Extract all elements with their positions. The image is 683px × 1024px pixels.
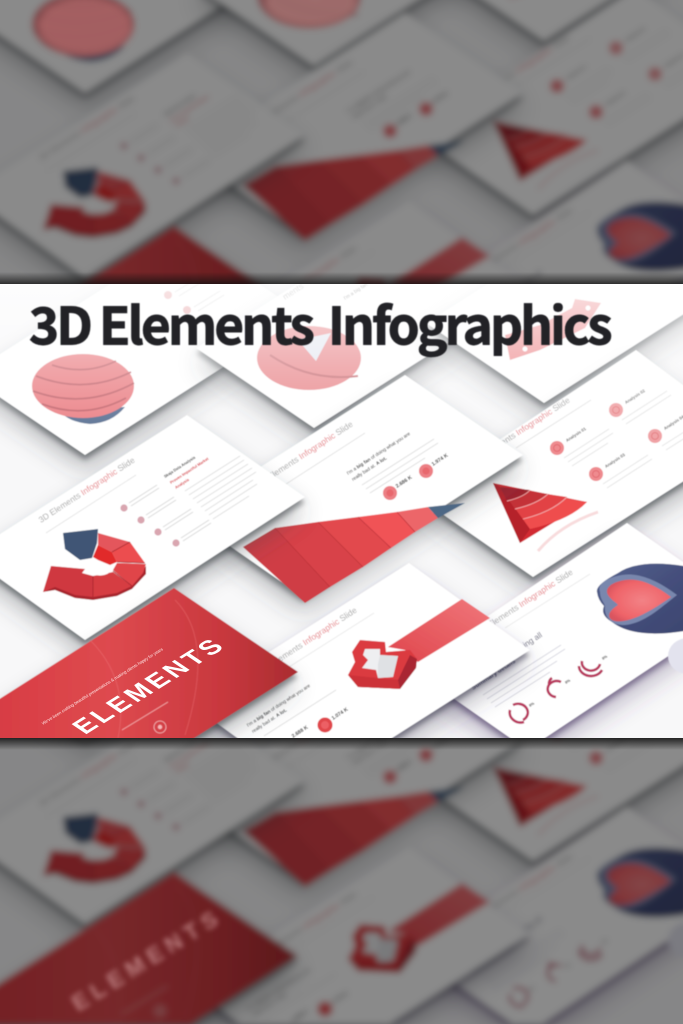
ring charts: 8% xyxy=(564,678,572,685)
list text and icons: Skaja Data Analysis xyxy=(163,455,196,479)
disc graphic xyxy=(257,326,361,390)
arrow graphic xyxy=(505,299,601,360)
blurred cover title: ELEMENTS xyxy=(67,902,228,1016)
slide: pyramid: 3D Elements Infographic Slide xyxy=(472,395,572,465)
title: 3D Elements xyxy=(29,286,313,360)
statistics text: really bad at. A lot. xyxy=(251,708,288,735)
slide: pyramid xyxy=(415,350,683,577)
swirl graphic xyxy=(43,529,146,600)
statistics text: really bad at. A lot. xyxy=(351,456,388,483)
cross graphic xyxy=(348,599,490,689)
staircase graphic xyxy=(243,503,465,603)
slide: red cross: 3D Elements Infographic Slide xyxy=(259,605,359,675)
statistics text: 2.686 K xyxy=(395,475,414,490)
slide: disc xyxy=(196,208,534,428)
cover button icon xyxy=(154,721,166,733)
statistics text xyxy=(246,683,350,740)
cover title: 3D xyxy=(13,733,71,771)
analysis icons: Analysis 02 xyxy=(624,388,646,405)
sphere graphic xyxy=(32,354,134,424)
panel: central slide collage xyxy=(0,284,683,738)
ring charts: 8% xyxy=(528,701,536,708)
statistics text xyxy=(346,431,450,500)
slide: disc: ments xyxy=(281,281,305,302)
list text and icons: Proven Impactful Market xyxy=(169,456,210,485)
pyramid graphic xyxy=(493,483,598,551)
panel: top blurred band xyxy=(0,0,683,284)
analysis icons: Analysis 01 xyxy=(565,426,587,443)
statistics text: 1.974 K xyxy=(431,453,450,468)
slide: red cover xyxy=(0,588,298,740)
slide: staircase: 3D Elements Infographic Slide xyxy=(255,419,355,489)
slide: staircase xyxy=(185,375,523,603)
panel: bottom blurred band xyxy=(0,738,683,1024)
summary text: Summary details xyxy=(470,658,517,692)
slide: disc: I'm a big fan xyxy=(343,282,369,302)
list text and icons xyxy=(120,455,257,547)
slide: swirl arrow xyxy=(0,415,305,640)
ring charts xyxy=(510,654,609,722)
panel: top washed-out overlay xyxy=(0,284,683,434)
slide: rings and heart: 3D Elements Infographic Slide xyxy=(475,567,575,637)
cover tagline: We've been crafting beautiful presentations & making clients happy for years xyxy=(41,646,164,726)
statistics text: I'm a big fan of doing what you are xyxy=(346,431,412,477)
ring charts: 8% xyxy=(601,654,609,661)
analysis icons: Analysis 03 xyxy=(604,452,626,469)
summary text: Using all xyxy=(513,630,544,655)
statistics text: 2.688 K xyxy=(291,725,310,740)
slide: red cross xyxy=(189,563,530,740)
title: Infographics xyxy=(328,286,611,360)
analysis icons xyxy=(550,388,683,488)
slide: rings and heart xyxy=(410,523,683,740)
cover title: ELEMENTS xyxy=(65,633,233,738)
statistics text: 1.074 K xyxy=(331,707,350,722)
statistics text: I'm a big fan of doing what you are xyxy=(246,683,312,729)
list text and icons: Analysis xyxy=(174,477,190,490)
summary text xyxy=(470,630,565,707)
slide: swirl arrow: 3D Elements Infographic Slide xyxy=(37,455,137,525)
slide: sphere xyxy=(0,235,305,455)
slide: arrow and analysis icons xyxy=(426,183,683,403)
heart graphic xyxy=(597,564,683,674)
